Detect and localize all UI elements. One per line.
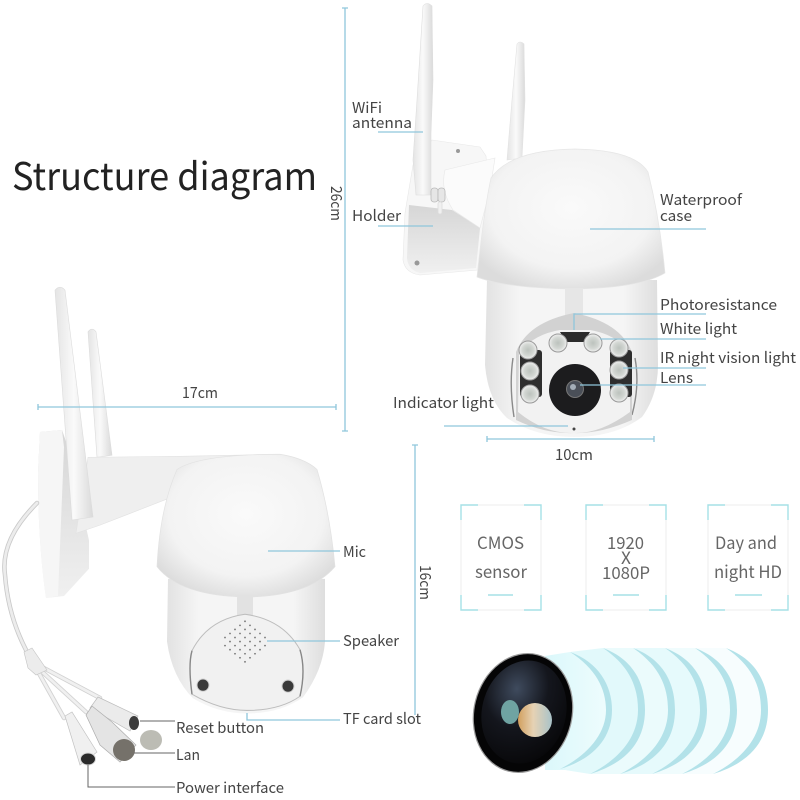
label: WiFi antenna: antenna: [352, 112, 412, 133]
lens glass: [471, 651, 577, 773]
label: Photoresistance: Photoresistance: [660, 294, 777, 315]
indicator dot: [572, 428, 576, 430]
label: Mic: Mic: [343, 541, 366, 562]
antenna joint: [431, 188, 445, 214]
side view leader lines: [38, 404, 340, 720]
cable and connectors: [4, 503, 162, 765]
side wings: [511, 358, 637, 417]
label: Speaker: Speaker: [343, 630, 399, 651]
label: Indicator light: Indicator light: [393, 392, 494, 413]
face gray ring: [516, 313, 632, 433]
feature card: 1920 x 1080P: 1080P: [602, 559, 650, 584]
label: White light: White light: [660, 318, 737, 339]
feature card: Day and night HD: night HD: [714, 558, 782, 583]
photoresistance window: [560, 332, 590, 342]
wall holder: [403, 140, 492, 275]
feature card: Day and night HD: [708, 505, 788, 610]
feature card: Day and night HD: Day and: [715, 529, 777, 554]
label: Lan: Lan: [176, 744, 200, 765]
dome case: [477, 149, 665, 289]
title: Structure diagram: [12, 146, 317, 201]
reset connector: [90, 697, 138, 731]
feature card: CMOS sensor: CMOS: [477, 529, 524, 554]
light beam: [545, 652, 607, 770]
front view leader lines: [378, 132, 706, 426]
lens body: [461, 643, 585, 783]
dimension: 26cm height: 26cm: [326, 186, 347, 221]
label: WiFi antenna: [352, 97, 412, 133]
feature card: 1920 x 1080P: [586, 505, 666, 610]
holder screw holes: [414, 149, 460, 266]
dome case: [157, 454, 335, 597]
lens illustration: [461, 643, 768, 783]
rubber cap: [140, 730, 162, 750]
rear holes: [197, 679, 294, 692]
beam ring edges: [560, 648, 768, 774]
antenna: front left: [413, 4, 433, 195]
feature card: 1920 x 1080P: X: [621, 544, 631, 569]
rear plate side trim: [190, 650, 303, 696]
LED panels: [520, 350, 632, 397]
holder shaded lower panel: [407, 205, 480, 273]
dimension: 10cm width: 10cm: [555, 444, 593, 465]
reset jack: [129, 716, 139, 730]
antenna: front: [55, 287, 93, 520]
lens core: [518, 703, 552, 737]
lower body: [167, 579, 325, 713]
beam rings: [565, 648, 768, 774]
lens reflection: [501, 700, 519, 724]
camera face plate: [518, 330, 630, 433]
label: Holder: Holder: [352, 205, 401, 226]
label: Lens: Lens: [660, 367, 693, 388]
dimension: 16cm height: 16cm: [415, 565, 436, 600]
label: WiFi antenna: WiFi: [352, 97, 382, 118]
side view camera: [38, 287, 335, 713]
cable: [4, 503, 100, 718]
lower body: [485, 280, 658, 437]
top strip: [565, 288, 583, 316]
plate front edge: [38, 430, 64, 598]
LAN connector: [86, 706, 136, 762]
mounting arm: [76, 454, 280, 533]
label: TF card slot: TF card slot: [343, 708, 421, 729]
cable splitter: [24, 648, 47, 675]
connector leader lines: [88, 721, 175, 787]
front view camera: [403, 4, 665, 437]
mounting arm: [444, 158, 495, 228]
label: Waterproof case: Waterproof: [660, 189, 743, 210]
label: Reset button: Reset button: [176, 717, 264, 738]
label: IR night vision light: IR night vision light: [660, 347, 796, 368]
rear face plate: [190, 614, 303, 710]
lens: [549, 364, 601, 416]
dimension: 10cm width: [487, 436, 654, 465]
dimension: 26cm height: [326, 8, 348, 431]
feature card: 1920 x 1080P: 1920: [607, 529, 644, 554]
label: Waterproof case: case: [660, 205, 692, 226]
antenna: rear: [88, 329, 112, 457]
wall plate: [38, 430, 89, 598]
dimension: 16cm height: [412, 445, 436, 715]
feature card: CMOS sensor: [461, 505, 541, 610]
label: Power interface: Power interface: [176, 777, 284, 798]
power connector: [65, 712, 97, 765]
feature card: CMOS sensor: sensor: [475, 558, 527, 583]
antenna: rear right: [507, 42, 525, 160]
dimension: 17cm width: 17cm: [182, 382, 218, 403]
top strip: [237, 597, 253, 615]
speaker holes: [224, 620, 266, 663]
LED lights: [519, 334, 628, 403]
label: Waterproof case: [660, 189, 743, 226]
